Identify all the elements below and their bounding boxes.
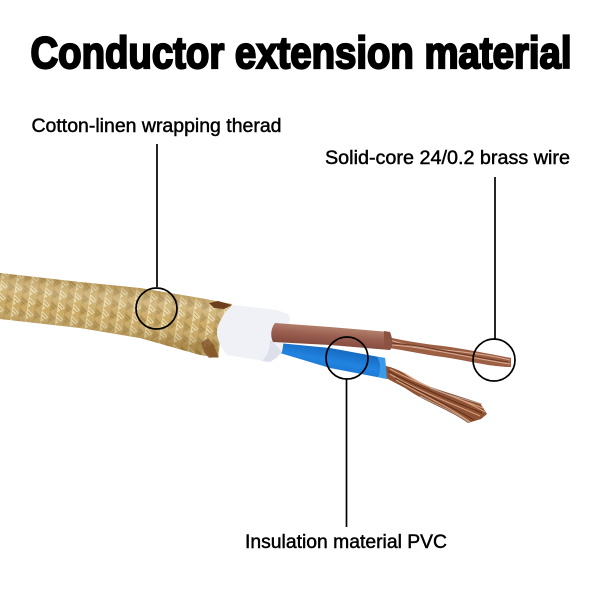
scorched edge marks — [209, 301, 232, 309]
label: insulation: Insulation material PVC — [245, 531, 447, 553]
callout: cotton-linen thread — [136, 144, 177, 329]
callout: insulation — [326, 337, 368, 527]
title: Conductor extension material — [30, 29, 572, 78]
brown insulated conductor — [271, 323, 392, 350]
blue conductor end — [377, 357, 387, 379]
exposed copper wire: upper strand — [388, 337, 511, 367]
blue insulated conductor — [278, 343, 387, 379]
callout: brass wire — [473, 177, 515, 381]
braided sleeve — [0, 273, 232, 358]
white inner sleeve — [217, 305, 290, 362]
cable illustration — [0, 273, 511, 423]
label: cotton-linen thread: Cotton-linen wrapping therad — [32, 115, 282, 137]
label: brass wire: Solid-core 24/0.2 brass wire — [325, 147, 570, 169]
exposed copper wire: lower strand — [386, 366, 487, 423]
